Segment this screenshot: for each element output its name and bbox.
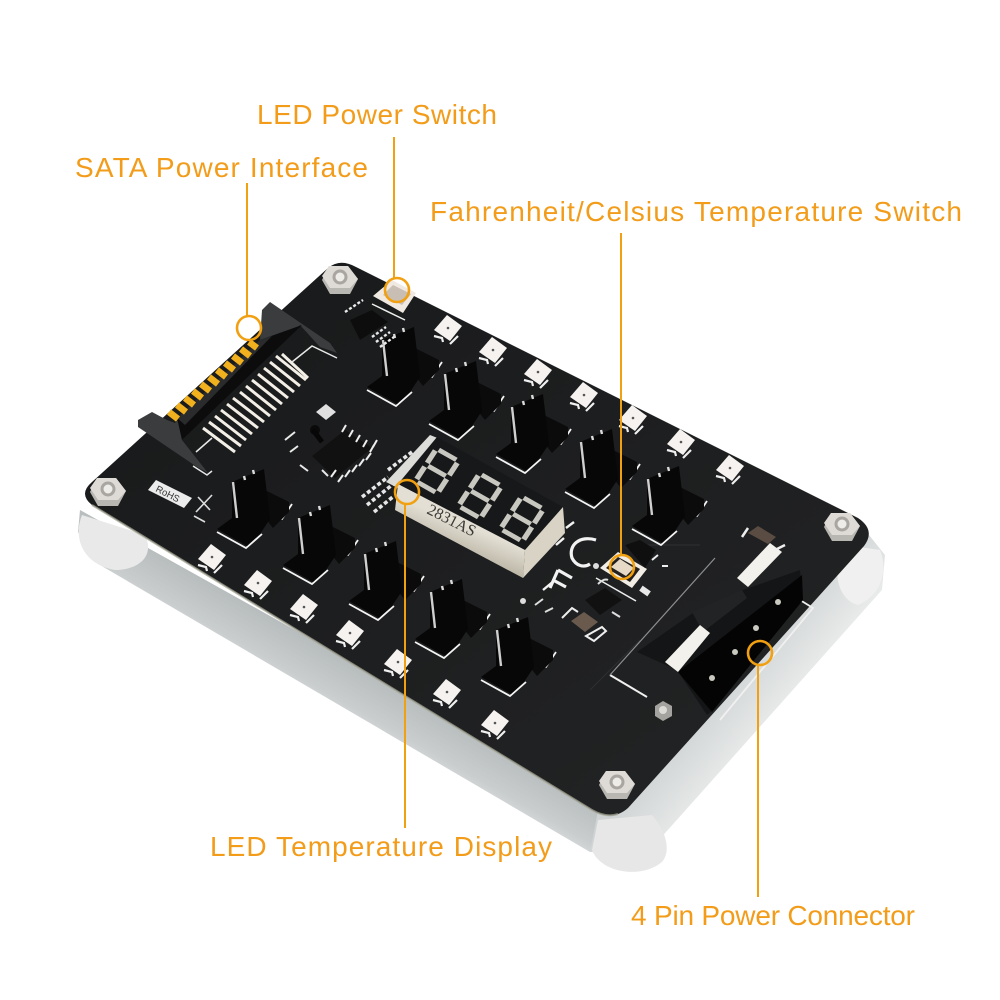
SATA power connector [138, 302, 337, 475]
connector screw [655, 701, 672, 721]
standoff: left [79, 515, 148, 570]
temperature switch [593, 540, 668, 601]
label: LED Temperature Display: LED Temperature Display [210, 831, 552, 862]
acrylic base plate [78, 510, 885, 872]
resistor pads beside display [362, 452, 412, 512]
label: 4 Pin Power Connector: 4 Pin Power Connector [631, 900, 915, 931]
circuit board [85, 263, 869, 816]
top row fan headers [367, 327, 707, 545]
standoff: right [837, 545, 883, 605]
bottom row fan headers [217, 469, 556, 696]
standoff: bottom [592, 815, 667, 872]
label: 4 Pin Power Connector [631, 641, 915, 931]
label: SATA Power Interface [75, 152, 368, 340]
label: LED Temperature Display [210, 480, 552, 862]
driver chip [285, 404, 377, 482]
rohs mark [148, 480, 212, 522]
digit segments [415, 449, 544, 541]
component C2 [748, 526, 776, 544]
LED power switch [372, 280, 416, 320]
label: Fahrenheit/Celsius Temperature Switch [430, 196, 962, 579]
label: Fahrenheit/Celsius Temperature Switch: Fahrenheit/Celsius Temperature Switch [430, 196, 962, 227]
part number: 2831AS [424, 501, 479, 540]
C and F silk marks [543, 522, 596, 590]
rohs mark: RoHS [154, 484, 181, 505]
bottom row LEDs [198, 544, 509, 739]
top row LEDs [434, 315, 744, 484]
label: LED Power Switch [257, 99, 497, 302]
label: SATA Power Interface: SATA Power Interface [75, 152, 368, 183]
LED display module [386, 435, 565, 578]
mounting nuts [90, 266, 860, 799]
gold contacts [169, 342, 257, 419]
small chip near switch [345, 300, 394, 347]
white solder pads [203, 354, 308, 452]
regulator and capacitors [520, 580, 622, 641]
label: LED Power Switch: LED Power Switch [257, 99, 497, 130]
4 pin power connector [610, 526, 813, 721]
